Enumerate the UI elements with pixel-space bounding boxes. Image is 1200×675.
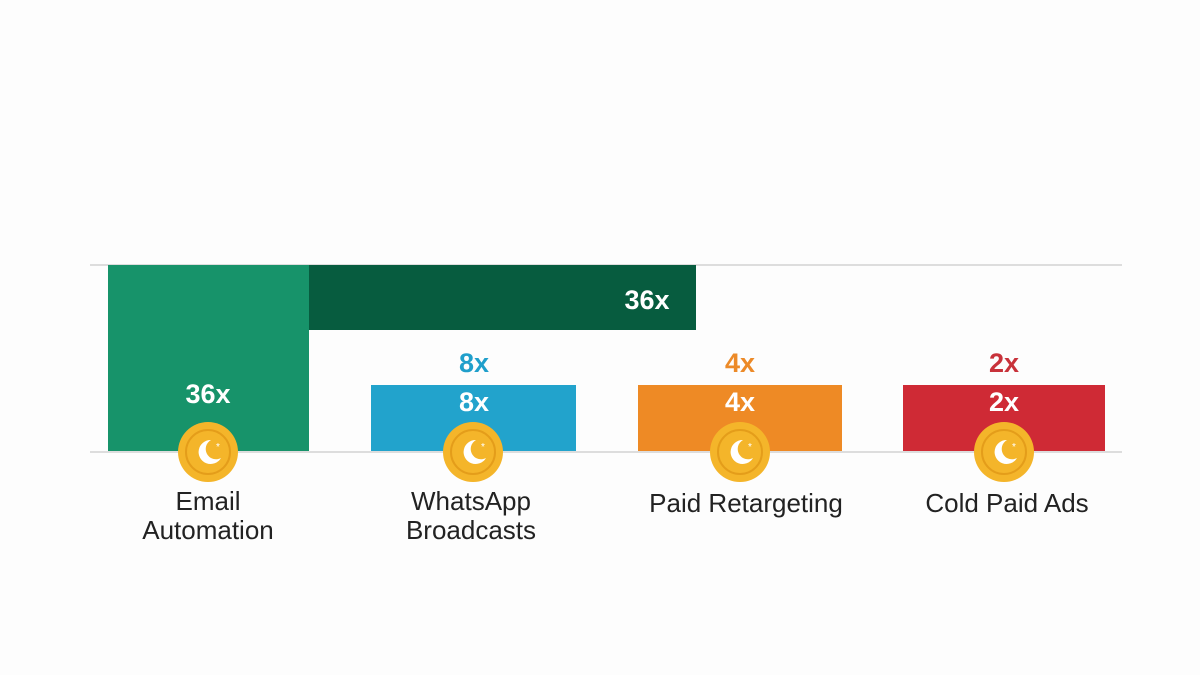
value: retargeting inside: 4x <box>725 387 755 417</box>
bar: paid retargeting <box>638 385 842 452</box>
label: paid retargeting: Paid Retargeting <box>649 488 843 518</box>
bar: 36x overlay <box>309 265 696 330</box>
label: email automation <box>142 486 274 545</box>
value: cold above: 2x <box>989 348 1019 378</box>
icon: coin whatsapp <box>443 422 503 482</box>
label: whatsapp broadcasts: WhatsApp <box>411 486 531 516</box>
bar: cold paid ads <box>903 385 1105 452</box>
icon: coin email <box>178 422 238 482</box>
bar: whatsapp <box>371 385 576 452</box>
top axis line <box>90 264 1122 266</box>
value: cold inside: 2x <box>989 387 1019 417</box>
icon: coin cold: * <box>1012 442 1016 453</box>
label: whatsapp broadcasts <box>406 486 536 545</box>
icon: coin cold <box>974 422 1034 482</box>
value: whatsapp inside: 8x <box>459 387 489 417</box>
label: email automation: Email <box>175 486 240 516</box>
icon: coin retargeting: * <box>748 442 752 453</box>
baseline <box>90 451 1122 453</box>
label: cold paid ads: Cold Paid Ads <box>925 488 1089 518</box>
value: 36x overlay: 36x <box>624 285 670 315</box>
bar: email automation <box>108 265 309 452</box>
label: email automation: Automation <box>142 515 274 545</box>
value: retargeting above: 4x <box>725 348 755 378</box>
value: email 36x: 36x <box>185 379 231 409</box>
label: whatsapp broadcasts: Broadcasts <box>406 515 536 545</box>
icon: coin email: * <box>216 442 220 453</box>
icon: coin whatsapp: * <box>481 442 485 453</box>
value: whatsapp above: 8x <box>459 348 489 378</box>
icon: coin retargeting <box>710 422 770 482</box>
